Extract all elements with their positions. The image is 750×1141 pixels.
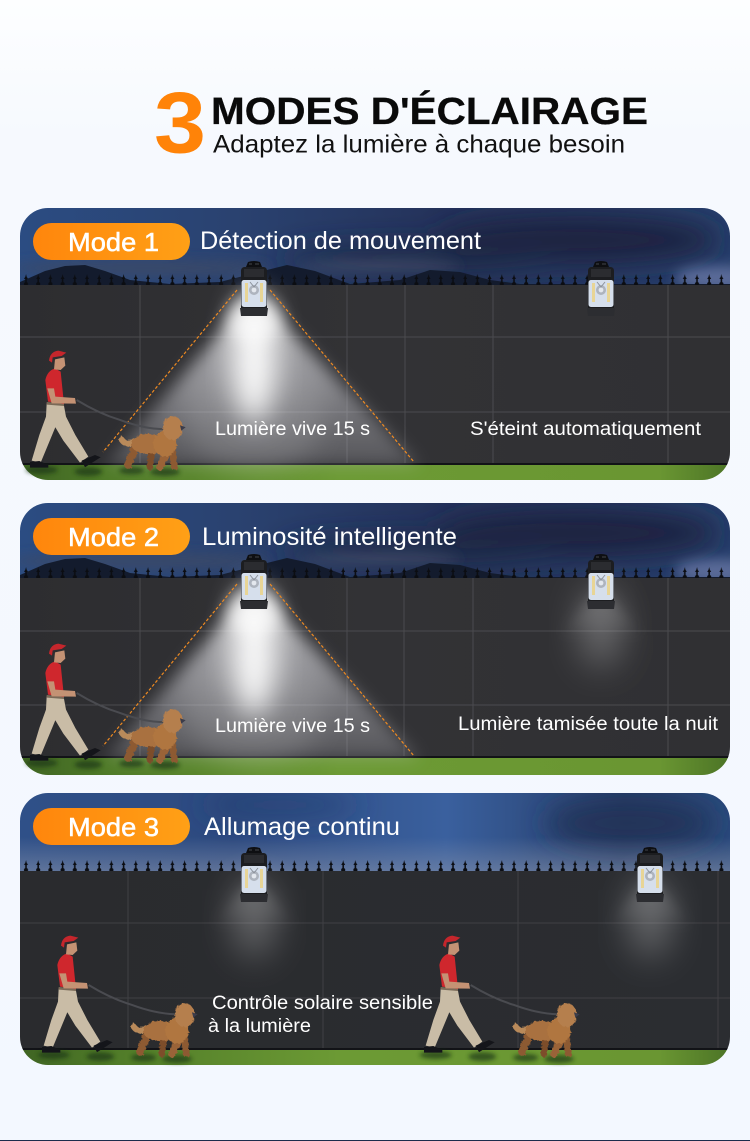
panel 3 dog left [131,1003,198,1063]
panel 1 left caption: Lumière vive 15 s [215,419,370,440]
panel 2 detection lines [103,584,414,756]
panel 3 dim glow left [210,877,298,957]
heading: modes d'éclairage: MODES D'ÉCLAIRAGE [211,89,648,133]
panel 1 lit lantern [240,261,268,316]
panel 1 scene [10,208,750,480]
panel 3 mode badge [33,808,190,845]
panel 2 right lantern [587,554,615,609]
panel 2 mode badge [33,518,190,555]
panel 1 detection lines [103,290,414,462]
panel 1 person walking [26,351,163,476]
big orange numeral 3: 3 [154,76,206,172]
panel 3 person left [38,936,175,1061]
panel 3 wall grid [20,871,730,1048]
panel 1 wall grid [20,285,730,463]
panel 3 mode badge: Mode 3 [68,812,159,842]
panel 3 scene [20,793,730,1065]
panel 3 caption: à la lumière [208,1016,311,1037]
panel: mode 1 [10,208,750,480]
panel 2 wall grid [20,578,730,756]
panel 2 mode badge: Mode 2 [68,522,159,552]
panel 2 heading: Luminosité intelligente [202,523,457,551]
panel 2 left lantern [240,554,268,609]
panel 1 light beam [105,292,420,473]
panel 2 dog [119,709,186,769]
panel 3 dim glow right [606,877,694,957]
panel 3 caption: Contrôle solaire sensible [212,993,433,1014]
panel 3 right lantern [636,847,664,902]
panel 3 dog right [513,1003,580,1063]
title [154,76,648,172]
panel 1 unlit lantern [587,261,615,316]
panel 2 bright beam [105,585,420,766]
panel 3 left lantern [240,847,268,902]
panel 3 person right [420,936,557,1061]
subtitle: Adaptez la lumière à chaque besoin [213,130,625,158]
panel 3 heading: Allumage continu [204,813,400,841]
panel 1 mode badge: Mode 1 [68,227,159,257]
panel 1 right caption: S'éteint automatiquement [470,419,702,440]
panel 2 dim glow [557,587,645,667]
panel: mode 3 [20,793,730,1065]
panel 1 heading: Détection de mouvement [200,227,481,255]
panel 2 scene [10,501,750,775]
panel 2 person walking [26,644,163,769]
panel 2 left caption: Lumière vive 15 s [215,716,370,737]
panel 1 dog [119,416,186,476]
panel 2 right caption: Lumière tamisée toute la nuit [458,714,719,735]
panel 1 mode badge [33,223,190,260]
panel 3 caption [208,993,433,1037]
panel: mode 2 [10,501,750,775]
